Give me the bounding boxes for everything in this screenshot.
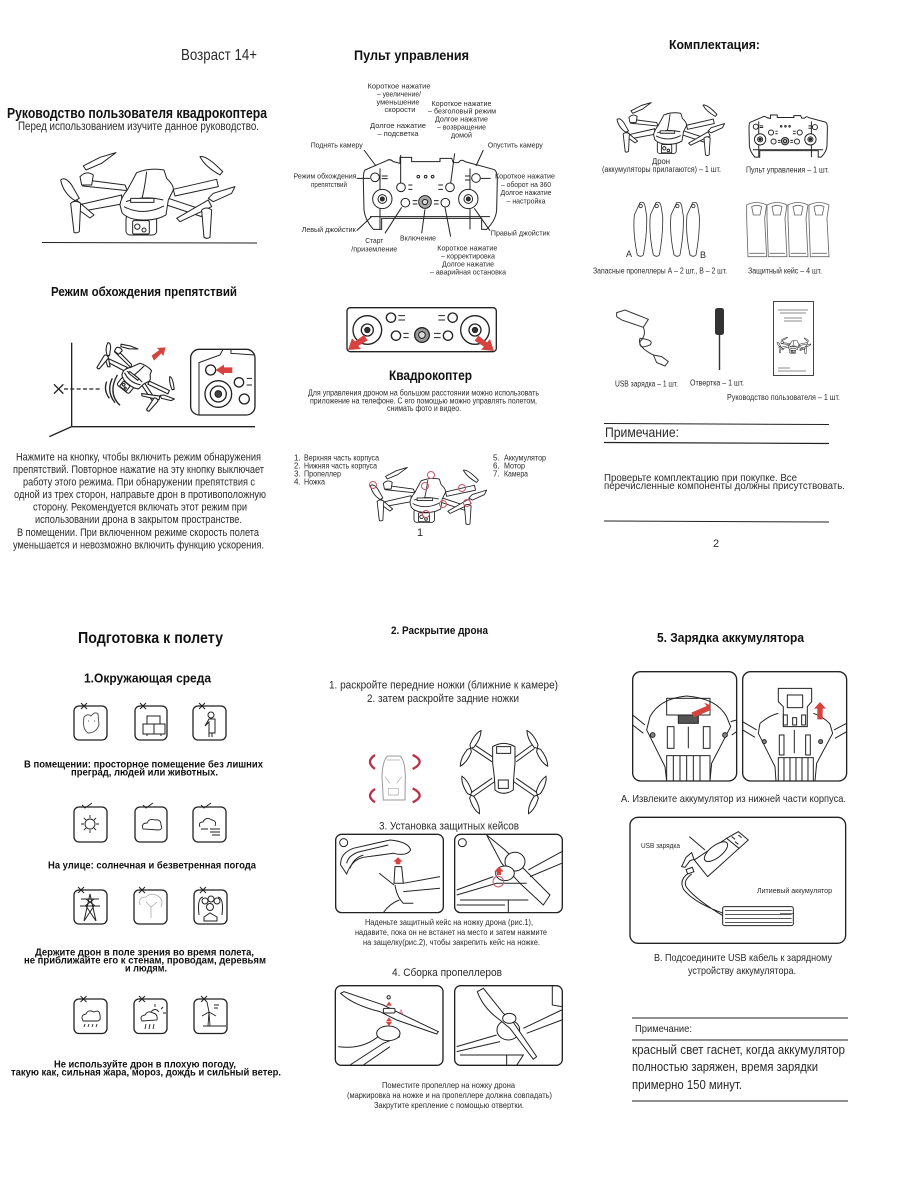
text: indoor advice: В помещении: просторное помещение без лишних (24, 759, 263, 771)
diagram: USB charger and battery: USB зарядка (641, 841, 681, 850)
panel: battery charging (621, 631, 848, 1101)
item: drone (602, 103, 725, 174)
diagram: unfolded drone top view (458, 729, 550, 815)
callout labels: Короткое нажатие (437, 243, 497, 252)
diagram: remote front with red joystick arrows (347, 308, 496, 352)
text block: obstacle mode description: уменьшается и невозможно включить функцию ускорения. (13, 540, 264, 552)
text block: app note: снимать фото и видео. (387, 404, 461, 413)
note box: check contents: перечисленные компоненты должны присутствовать. (604, 480, 845, 492)
text: outdoor advice: На улице: солнечная и безветренная погода (48, 859, 256, 871)
text block: obstacle mode description: одной из трех сторон, направьте дрон в противоположную (14, 489, 266, 501)
callout labels (294, 82, 555, 276)
diagram: USB charger and battery (630, 817, 846, 943)
text: keep distance advice: Держите дрон в поле зрения во время полета, (35, 946, 254, 958)
callout labels: скорости (384, 105, 416, 114)
callout labels: – подсветка (378, 129, 419, 138)
note box: charging time: полностью заряжен, время зарядки (632, 1060, 818, 1074)
diagram: install case step 2 (455, 834, 562, 913)
item: spare propellers: B (700, 250, 706, 260)
callout labels: Режим обхождения (294, 172, 356, 181)
parts legend right (493, 454, 546, 479)
parts legend left: Ножка (304, 477, 325, 486)
text: propeller instructions: Закрутите крепление с помощью отвертки. (374, 1101, 524, 1110)
callout labels: домой (451, 131, 472, 140)
diagram: drone with numbered parts (370, 467, 487, 525)
text block: obstacle mode description: В помещении. При включенном режиме скорость полета (17, 527, 260, 539)
text block: app note: Для управления дроном на большом расстоянии можно использовать (308, 389, 539, 398)
text: keep distance advice (24, 946, 266, 975)
item: USB charger: USB зарядка – 1 шт. (615, 380, 678, 389)
note box: check contents: Проверьте комплектацию при покупке. Все (604, 472, 797, 484)
text: propeller instructions: Поместите пропеллер на ножку дрона (382, 1081, 516, 1090)
parts legend right: Аккумулятор (504, 454, 546, 463)
callout labels: Опустить камеру (488, 141, 543, 150)
text block: obstacle mode description: работу этого режима. При обнаружении препятствия с (23, 476, 255, 488)
caption B (654, 952, 833, 977)
diagram: remote control with callouts (357, 150, 497, 237)
text block: app note (308, 389, 539, 413)
icons: indoor hazards (74, 703, 226, 740)
icons: good outdoor weather (74, 803, 226, 842)
heading: unfolding: 2. Раскрытие дрона (391, 625, 489, 637)
parts legend right: Мотор (504, 461, 525, 470)
text block: obstacle mode description: сторону. Рекомендуется включать этот режим при (33, 502, 247, 514)
parts legend left: 4. (294, 477, 301, 486)
parts legend right: 7. (493, 470, 500, 479)
callout labels: Короткое нажатие (495, 172, 555, 181)
text: case instructions: надавите, пока он не встанет на место и затем нажмите (355, 928, 548, 937)
callout labels: Поднять камеру (311, 141, 363, 150)
callout labels: Короткое нажатие (432, 99, 492, 108)
parts legend left: 3. (294, 470, 301, 479)
text: keep distance advice: не приближайте его к стенам, проводам, деревьям (24, 954, 266, 966)
text: case instructions: на защелку(рис.2), чтобы закрепить кейс на ножке. (363, 938, 540, 947)
item: screwdriver: Отвертка – 1 шт. (690, 379, 744, 388)
text: bad weather advice (11, 1058, 281, 1078)
note box: charging time (632, 1018, 848, 1101)
panel: quadcopter (294, 368, 546, 539)
note box: check contents (604, 424, 845, 522)
item: remote control (746, 115, 829, 175)
diagram: propeller assembly step 1: A (399, 1010, 404, 1017)
text: unfolding steps (329, 679, 558, 705)
panel: flight preparation (11, 630, 281, 1078)
item: spare propellers (593, 202, 727, 276)
panel: obstacle avoidance (13, 284, 266, 552)
panel: cover (7, 47, 268, 243)
diagram: folded drone with red arrows (370, 755, 420, 802)
text block: obstacle mode description: Нажмите на кнопку, чтобы включить режим обнаружения (16, 452, 261, 464)
page number 2: 2 (713, 538, 719, 550)
parts legend left (294, 454, 379, 486)
diagram: wall and drone (49, 332, 255, 437)
callout labels: Старт (365, 236, 384, 245)
caption A: А. Извлеките аккумулятор из нижней части корпуса. (621, 793, 846, 805)
caption B: В. Подсоедините USB кабель к зарядному (654, 952, 833, 964)
text: indoor advice (24, 759, 263, 778)
parts legend left: Верхняя часть корпуса (304, 454, 379, 463)
text: unfolding steps: 1. раскройте передние ножки (ближние к камере) (329, 679, 558, 691)
callout labels: Долгое нажатие (435, 114, 488, 124)
subheading: Перед использованием изучите данное руководство. (18, 121, 259, 133)
text block: app note: приложение на телефоне. С его помощью можно управлять полетом, (310, 396, 537, 405)
item: manual booklet (727, 302, 840, 402)
text: indoor advice: преград, людей или животных. (71, 766, 218, 778)
callout labels: – увеличение/ (377, 90, 422, 98)
callout labels: – аварийная остановка (430, 267, 507, 276)
callout labels: Короткое нажатие (368, 82, 430, 90)
note box: charging time: Примечание: (635, 1023, 692, 1035)
item: protective cases: Защитный кейс – 4 шт. (748, 267, 822, 276)
callout labels: – безголовый режим (428, 107, 496, 116)
diagram: battery in drone (633, 672, 737, 781)
callout labels: Включение (400, 233, 436, 242)
parts legend right: Камера (504, 470, 528, 479)
note box: charging time: красный свет гаснет, когда аккумулятор (632, 1043, 845, 1057)
callout labels: – возвращение (437, 122, 486, 132)
diagram: USB charger and battery: Литиевый аккумулятор (757, 886, 832, 895)
callout labels: Долгое нажатие (500, 188, 552, 197)
heading: preparation: Подготовка к полету (78, 630, 223, 647)
callout labels: Долгое нажатие (370, 121, 426, 130)
callout labels: – корректировка (441, 252, 496, 261)
diagram: install case step 1 (336, 834, 443, 913)
callout labels: Правый джойстик (491, 228, 550, 237)
heading: remote control: Пульт управления (354, 48, 469, 63)
text: case instructions (355, 918, 548, 947)
text: bad weather advice: такую как, сильная жара, мороз, дождь и сильный ветер. (11, 1066, 281, 1078)
parts legend left: 1. (294, 454, 301, 463)
text block: obstacle mode description (13, 452, 266, 552)
item: remote control: Пульт управления – 1 шт. (746, 166, 829, 175)
panel: unfolding and assembly (329, 625, 562, 1110)
text: unfolding steps: 2. затем раскройте задние ножки (367, 693, 519, 705)
text: bad weather advice: Не используйте дрон в плохую погоду, (54, 1058, 236, 1070)
icon: drone front view (61, 153, 235, 238)
text: propeller instructions (347, 1081, 552, 1110)
parts legend right: 5. (493, 454, 500, 463)
heading: protective cases: 3. Установка защитных кейсов (379, 820, 519, 832)
item: manual booklet: Руководство пользователя – 1 шт. (727, 393, 840, 402)
note box: charging time: примерно 150 минут. (632, 1078, 742, 1092)
icons: outdoor hazards (74, 887, 227, 924)
text block: obstacle mode description: препятствий. Повторное нажатие на эту кнопку выключает (13, 464, 264, 476)
subheading: environment: 1.Окружающая среда (84, 671, 212, 686)
panel: package contents (593, 37, 845, 550)
age label: Возраст 14+ (181, 47, 257, 64)
callout labels: Левый джойстик (302, 225, 356, 234)
heading: propellers: 4. Сборка пропеллеров (392, 967, 502, 979)
panel: remote control (294, 48, 555, 352)
heading: charging: 5. Зарядка аккумулятора (657, 631, 805, 645)
item: screwdriver (690, 308, 744, 388)
item: spare propellers: Запасные пропеллеры А – 2 шт., В – 2 шт. (593, 267, 727, 276)
ground line (42, 242, 257, 244)
diagram: propeller assembly step 1 (335, 986, 443, 1065)
item: USB charger (615, 310, 678, 389)
heading: obstacle mode: Режим обхождения препятствий (51, 284, 237, 299)
icons: bad weather (74, 996, 227, 1034)
page number 1: 1 (417, 527, 423, 539)
parts legend left: Пропеллер (304, 470, 341, 479)
caption B: устройству аккумулятора. (688, 965, 796, 977)
diagram: battery pulled out (743, 672, 847, 781)
parts legend right: 6. (493, 461, 500, 470)
text: case instructions: Наденьте защитный кейс на ножку дрона (рис.1), (365, 918, 533, 927)
item: spare propellers: A (626, 249, 632, 259)
item: drone: (аккумуляторы прилагаются) – 1 шт. (602, 165, 721, 174)
heading: quadcopter: Квадрокоптер (389, 368, 472, 383)
callout labels: уменьшение (376, 98, 420, 106)
text: propeller instructions: (маркировка на ножке и на пропеллере должна совпадать) (347, 1091, 552, 1100)
callout labels: препятствий (311, 180, 347, 189)
text: keep distance advice: и людям. (125, 963, 167, 975)
callout labels: – оборот на 360 (501, 180, 551, 189)
callout labels: Долгое нажатие (442, 259, 494, 268)
diagram: propeller assembly step 2 (455, 986, 562, 1065)
note box: check contents: Примечание: (605, 424, 679, 440)
text block: obstacle mode description: использовании дрона в закрытом пространстве. (35, 514, 242, 526)
heading: contents: Комплектация: (669, 37, 760, 52)
callout labels: /приземление (351, 244, 397, 253)
parts legend left: Нижняя часть корпуса (304, 461, 377, 470)
item: protective cases (747, 202, 829, 276)
callout labels: – настройка (506, 196, 546, 206)
item: drone: Дрон (652, 157, 670, 166)
parts legend left: 2. (294, 461, 301, 470)
heading: user manual: Руководство пользователя квадрокоптера (7, 106, 268, 122)
